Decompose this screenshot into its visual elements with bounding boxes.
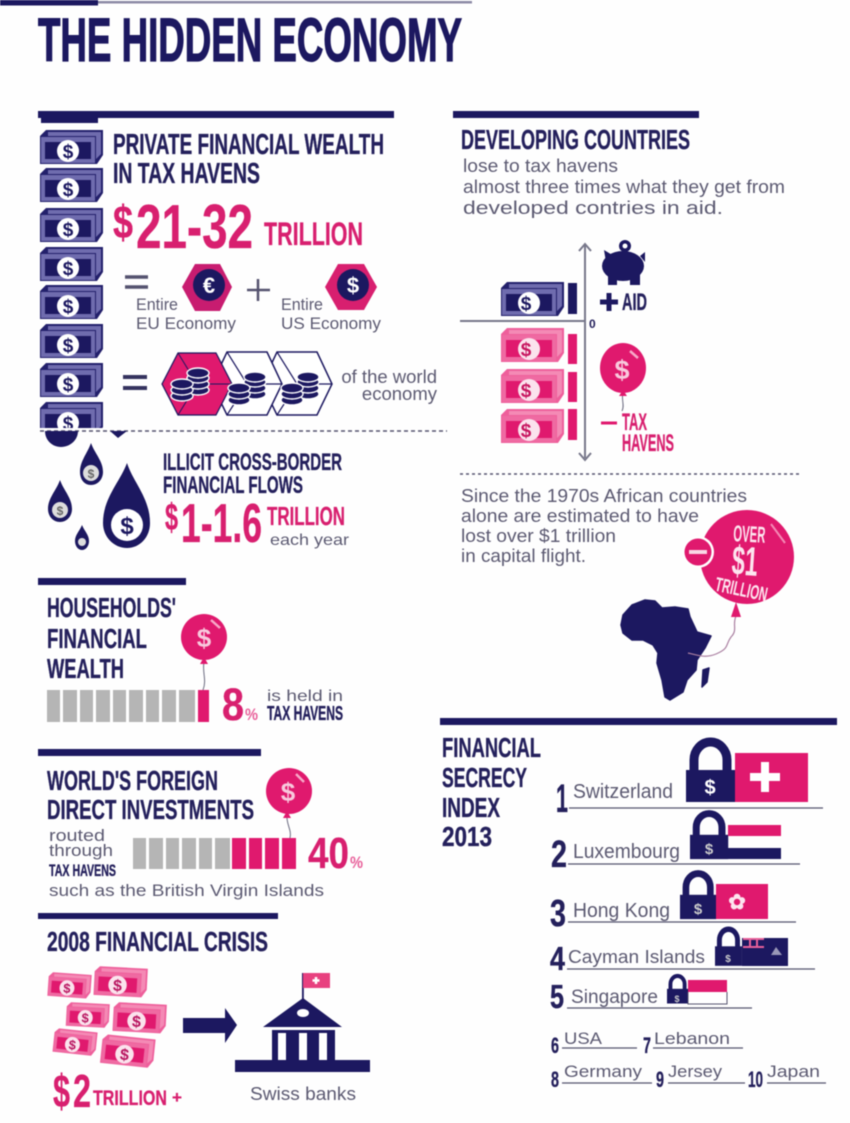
amount: 21-32 bbox=[136, 193, 253, 262]
icon: balloon bbox=[266, 768, 312, 838]
rank 3: Hong Kong: $ bbox=[694, 901, 703, 918]
label: EU economy bbox=[136, 295, 237, 333]
panel: private financial wealth bbox=[36, 111, 438, 442]
amount: $ bbox=[113, 196, 133, 248]
dotted divider bbox=[40, 430, 447, 432]
rank 2: Luxembourg: 2 bbox=[551, 834, 567, 876]
icon: pink banknotes: $ bbox=[132, 1013, 141, 1031]
icon: pink banknotes: $ bbox=[119, 1046, 130, 1065]
ranks 6 and 7: Lebanon bbox=[654, 1029, 730, 1048]
icon: big balloon bbox=[682, 510, 794, 617]
chart: aid vs tax havens: $ bbox=[521, 421, 532, 442]
dotted divider bbox=[460, 473, 801, 475]
amount bbox=[165, 492, 262, 554]
panel: 2008 financial crisis bbox=[38, 913, 370, 1117]
heading: FINANCIAL bbox=[47, 623, 147, 654]
icon: stack of banknotes: $ bbox=[63, 375, 74, 396]
heading line 2: IN TAX HAVENS bbox=[113, 158, 260, 190]
value: 40 bbox=[308, 829, 349, 878]
unit: TRILLION bbox=[93, 1087, 167, 1110]
icon: pink banknotes: $ bbox=[63, 980, 72, 996]
ranks 6 and 7 bbox=[551, 1029, 743, 1058]
balloon string bbox=[688, 616, 736, 656]
label: tax havens bbox=[601, 409, 674, 457]
ranks 8, 9 and 10: 8 bbox=[551, 1067, 559, 1092]
icon: stack of banknotes: $ bbox=[63, 180, 74, 201]
bar: 8 percent bbox=[47, 690, 209, 722]
heading bbox=[47, 592, 176, 684]
ranks 8, 9 and 10: 10 bbox=[748, 1067, 763, 1092]
label: US economy bbox=[281, 295, 382, 333]
label: tax havens: HAVENS bbox=[622, 430, 674, 457]
caption: routed bbox=[49, 827, 105, 845]
plus sign bbox=[247, 279, 270, 301]
icon: money drops bbox=[45, 431, 150, 550]
rank 3: Hong Kong bbox=[550, 874, 796, 935]
bar: 40 percent bbox=[133, 838, 296, 869]
value: 8 bbox=[222, 679, 244, 730]
icon: stack of banknotes: $ bbox=[63, 336, 74, 357]
text block bbox=[461, 486, 747, 566]
chart: aid vs tax havens bbox=[460, 244, 596, 460]
heading bbox=[442, 732, 541, 852]
caption: is held in bbox=[267, 688, 343, 705]
icon: money drops: $ bbox=[88, 467, 95, 481]
icon: stack of banknotes: $ bbox=[63, 259, 74, 280]
label: aid bbox=[600, 289, 647, 316]
icon: pink banknotes: $ bbox=[113, 977, 122, 995]
rank 1: Switzerland: 1 bbox=[556, 777, 568, 821]
title: THE HIDDEN ECONOMY bbox=[38, 6, 462, 74]
heading: DEVELOPING COUNTRIES bbox=[461, 124, 690, 155]
rank 2: Luxembourg bbox=[551, 814, 800, 876]
heading: SECRECY bbox=[442, 762, 527, 793]
plus sign: + bbox=[172, 1088, 182, 1107]
caption: through bbox=[49, 842, 113, 860]
heading: HOUSEHOLDS' bbox=[47, 592, 176, 623]
icon: balloon bbox=[181, 614, 227, 690]
equals sign bbox=[123, 377, 147, 388]
panel: foreign direct investments bbox=[38, 749, 363, 900]
heading line 2: FINANCIAL FLOWS bbox=[163, 472, 303, 499]
icon: swiss bank bbox=[235, 973, 370, 1072]
unit: TRILLION bbox=[267, 501, 345, 531]
rank 5: Singapore: 5 bbox=[550, 978, 564, 1015]
icon: balloon: $ bbox=[614, 355, 630, 385]
rank 5: Singapore bbox=[550, 976, 752, 1015]
caption: TAX HAVENS bbox=[267, 703, 343, 725]
icon: pink banknotes: $ bbox=[68, 1037, 77, 1053]
caption bbox=[267, 688, 343, 725]
heading: PRIVATE FINANCIAL WEALTH bbox=[113, 129, 384, 161]
panel: developing countries bbox=[453, 111, 785, 460]
rank 1: Switzerland: Switzerland bbox=[573, 781, 673, 803]
label: EU economy: Entire bbox=[136, 295, 178, 314]
unit: TRILLION bbox=[264, 216, 363, 252]
icon: big balloon: OVER bbox=[733, 520, 766, 548]
text block: lose to tax havens bbox=[463, 156, 618, 176]
rank 4: Cayman Islands: Cayman Islands bbox=[568, 946, 705, 967]
ranks 8, 9 and 10: Germany bbox=[564, 1062, 643, 1081]
icon: pink banknotes: $ bbox=[81, 1010, 90, 1026]
text block: developed contries in aid. bbox=[463, 198, 723, 218]
text block: almost three times what they get from bbox=[463, 177, 785, 197]
ranks 6 and 7: USA bbox=[564, 1029, 603, 1048]
ranks 8, 9 and 10: Japan bbox=[767, 1062, 820, 1081]
percent sign: % bbox=[350, 853, 363, 872]
chart: aid vs tax havens: 0 bbox=[589, 317, 596, 331]
icon: stack of banknotes: $ bbox=[63, 142, 74, 163]
icon: big balloon: TRILLION bbox=[713, 574, 769, 606]
chart: aid vs tax havens: $ bbox=[521, 294, 532, 315]
text block: in capital flight. bbox=[461, 546, 586, 566]
rank 3: Hong Kong: 3 bbox=[550, 893, 566, 935]
label: aid: AID bbox=[622, 289, 647, 316]
icon: stack of banknotes: $ bbox=[63, 220, 74, 241]
caption: such as the British Virgin Islands bbox=[49, 881, 324, 900]
label: tax havens: TAX bbox=[622, 409, 647, 436]
rank 2: Luxembourg: Luxembourg bbox=[573, 841, 680, 863]
icon: dollar hexagon: $ bbox=[347, 273, 359, 298]
arrow bbox=[183, 1008, 237, 1043]
chart: aid vs tax havens: $ bbox=[521, 340, 532, 361]
heading: 2013 bbox=[442, 821, 492, 852]
label: Swiss banks bbox=[250, 1084, 356, 1104]
caption: economy bbox=[362, 383, 438, 404]
icon: balloon bbox=[600, 343, 646, 411]
icon: money drops: $ bbox=[57, 504, 64, 518]
amount: 1-1.6 bbox=[181, 492, 262, 554]
rank 5: Singapore: $ bbox=[674, 994, 680, 1004]
icon: balloon: $ bbox=[281, 777, 296, 807]
percent sign: % bbox=[245, 705, 258, 724]
caption: TAX HAVENS bbox=[49, 861, 116, 880]
caption bbox=[341, 366, 438, 404]
caption: each year bbox=[270, 532, 350, 549]
icon: stack of banknotes bbox=[36, 130, 108, 442]
panel: illicit flows bbox=[45, 431, 350, 554]
ranks 6 and 7: 7 bbox=[643, 1033, 651, 1058]
icon: three coin hexagons bbox=[162, 352, 332, 415]
icon: stack of banknotes: $ bbox=[63, 297, 74, 318]
label: US economy: Entire bbox=[281, 295, 323, 314]
rank 1: Switzerland bbox=[556, 742, 823, 821]
icon: stack of banknotes: $ bbox=[63, 414, 74, 435]
icon: piggy bank bbox=[602, 240, 645, 285]
amount bbox=[53, 1065, 91, 1117]
icon: balloon: $ bbox=[197, 623, 212, 653]
rank 4: Cayman Islands: $ bbox=[725, 954, 731, 965]
rank 4: Cayman Islands bbox=[550, 929, 815, 977]
rank 3: Hong Kong: Hong Kong bbox=[573, 900, 670, 922]
rank 3: Hong Kong: ✿ bbox=[728, 891, 746, 914]
heading bbox=[47, 765, 254, 825]
heading: 2008 FINANCIAL CRISIS bbox=[47, 926, 268, 957]
heading: INDEX bbox=[442, 792, 500, 823]
heading: WORLD'S FOREIGN bbox=[47, 765, 218, 796]
text block: Since the 1970s African countries bbox=[461, 486, 747, 506]
top rule bbox=[0, 0, 472, 6]
amount: $ bbox=[165, 497, 178, 539]
panel: financial secrecy index bbox=[440, 718, 837, 1092]
equals sign bbox=[125, 277, 148, 287]
ranks 8, 9 and 10: Jersey bbox=[668, 1062, 723, 1081]
icon: dollar hexagon bbox=[325, 264, 377, 310]
icon: euro hexagon: € bbox=[203, 273, 215, 298]
chart: aid vs tax havens: $ bbox=[521, 381, 532, 402]
label: EU economy: EU Economy bbox=[136, 314, 237, 333]
rank 5: Singapore: Singapore bbox=[571, 987, 658, 1008]
heading: DIRECT INVESTMENTS bbox=[47, 794, 254, 825]
text block bbox=[463, 156, 785, 218]
rank 1: Switzerland: $ bbox=[704, 777, 716, 799]
ranks 6 and 7: 6 bbox=[551, 1033, 559, 1058]
icon: pink banknotes bbox=[47, 966, 167, 1068]
caption bbox=[49, 827, 116, 880]
caption: of the world bbox=[341, 366, 437, 387]
ranks 8, 9 and 10 bbox=[551, 1062, 826, 1092]
rank 2: Luxembourg: $ bbox=[705, 841, 714, 858]
amount: $ bbox=[53, 1065, 70, 1117]
text block: alone are estimated to have bbox=[461, 506, 699, 526]
heading: WEALTH bbox=[47, 653, 124, 684]
icon: big balloon: $1 bbox=[730, 537, 760, 585]
panel: households' financial wealth bbox=[38, 578, 343, 730]
heading: ILLICIT CROSS-BORDER bbox=[163, 449, 342, 476]
icon: money drops: $ bbox=[120, 513, 134, 540]
text block: lost over $1 trillion bbox=[461, 526, 616, 546]
amount bbox=[113, 193, 253, 262]
ranks 8, 9 and 10: 9 bbox=[656, 1067, 664, 1092]
icon: euro hexagon bbox=[182, 264, 232, 311]
label: US economy: US Economy bbox=[281, 314, 382, 333]
rank 4: Cayman Islands: 4 bbox=[550, 940, 566, 977]
icon: map of Africa bbox=[621, 600, 711, 700]
amount: 2 bbox=[73, 1065, 91, 1117]
panel: capital flight bbox=[461, 486, 794, 700]
heading: FINANCIAL bbox=[442, 732, 541, 763]
